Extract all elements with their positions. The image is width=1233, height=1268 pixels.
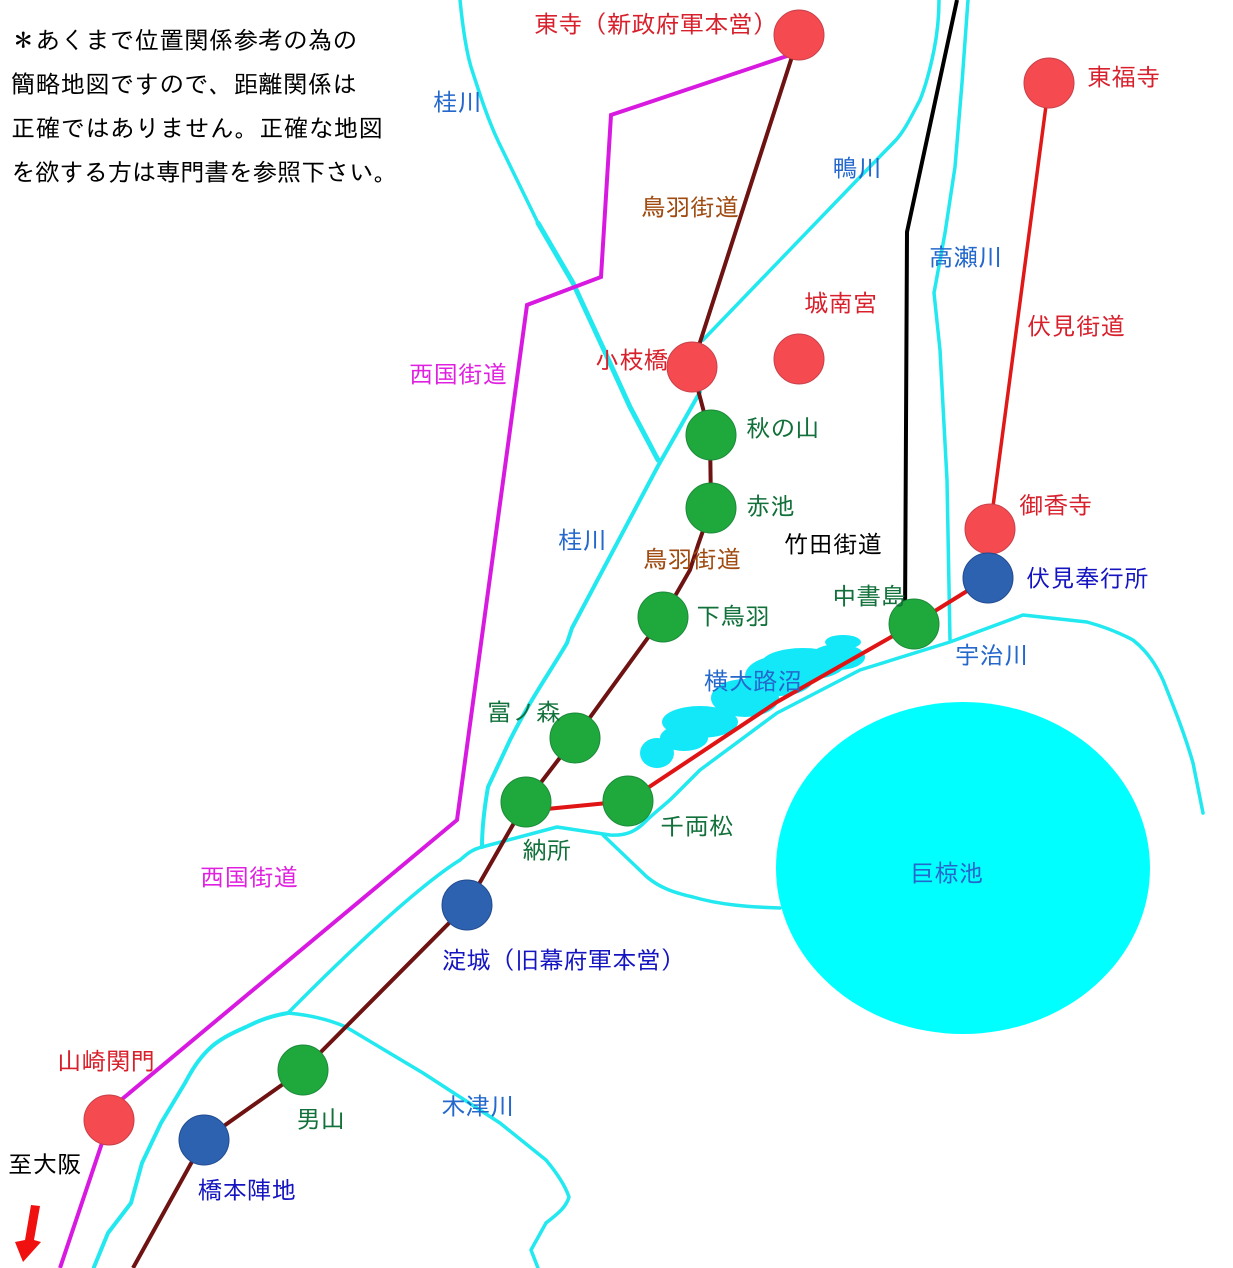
labels: rivers	[433, 90, 1028, 1121]
arrow: to Osaka	[15, 1205, 41, 1262]
labels: rivers: 木津川	[441, 1094, 514, 1121]
labels: Toba Kaido	[641, 195, 741, 574]
river: Katsura upper thick section	[538, 223, 658, 460]
labels: red places: 山崎関門	[57, 1049, 155, 1076]
labels: Toba Kaido: 鳥羽街道	[643, 547, 741, 574]
labels: black: 竹田街道	[784, 532, 882, 559]
road: Saigoku Kaido	[60, 53, 796, 1268]
river: Kizu east	[288, 1013, 569, 1268]
labels: black	[8, 532, 882, 1179]
labels: red places: 城南宮	[804, 291, 878, 318]
red markers	[84, 10, 1074, 1145]
labels: rivers: 宇治川	[955, 643, 1028, 670]
labels: green places: 赤池	[746, 494, 795, 521]
labels: green places: 下鳥羽	[696, 604, 770, 631]
labels: Toba Kaido: 鳥羽街道	[641, 195, 739, 222]
river: Ogura outlet	[603, 835, 780, 908]
road: Fushimi to Yodo	[526, 578, 988, 811]
note text	[11, 28, 398, 187]
labels: black: 至大阪	[8, 1152, 82, 1179]
blue markers	[179, 553, 1013, 1165]
labels: rivers: 桂川	[558, 528, 607, 555]
labels: green places: 千両松	[660, 814, 734, 841]
river: Katsura lower	[482, 392, 700, 847]
road: Toba Kaido	[133, 35, 799, 1268]
green markers	[278, 410, 939, 1095]
note text: ＊あくまで位置関係参考の為の	[11, 28, 357, 55]
labels: green places: 納所	[522, 838, 571, 865]
road: Takeda Kaido	[905, 0, 957, 622]
labels: blue places: 伏見奉行所	[1026, 566, 1148, 593]
labels: rivers: 巨椋池	[910, 861, 984, 888]
labels: red places: 東寺（新政府軍本営）	[534, 12, 777, 39]
river: Kizu west	[94, 1013, 288, 1267]
labels: rivers: 鴨川	[833, 156, 882, 183]
note text: を欲する方は専門書を参照下さい。	[11, 160, 398, 187]
labels: red places: 小枝橋	[595, 348, 668, 375]
river: Kamo	[703, 0, 939, 340]
labels: green places: 男山	[296, 1107, 345, 1134]
river: Takase	[934, 0, 968, 640]
labels: red places: 東福寺	[1087, 65, 1160, 92]
labels: red places: 伏見街道	[1027, 314, 1125, 341]
labels: rivers: 横大路沼	[704, 669, 802, 696]
river: Yodo	[288, 847, 482, 1013]
labels: rivers: 高瀬川	[929, 245, 1002, 272]
marsh: Yokotaiji-numa	[640, 635, 865, 768]
lake: Ogura-ike	[776, 702, 1150, 1034]
labels: blue places: 淀城（旧幕府軍本営）	[442, 948, 685, 975]
labels: green places: 富ノ森	[487, 700, 560, 727]
river: Katsura upper	[460, 0, 538, 223]
labels: red places	[57, 12, 1160, 1076]
labels: rivers: 桂川	[433, 90, 482, 117]
river: Uji	[482, 615, 1203, 847]
labels: Saigoku Kaido: 西国街道	[409, 362, 507, 389]
labels: blue places: 橋本陣地	[198, 1178, 296, 1205]
labels: Saigoku Kaido: 西国街道	[200, 865, 298, 892]
note text: 簡略地図ですので、距離関係は	[11, 72, 357, 99]
labels: Saigoku Kaido	[200, 362, 507, 892]
labels: red places: 御香寺	[1019, 493, 1092, 520]
road: Fushimi Kaido	[990, 83, 1049, 529]
labels: blue places	[198, 566, 1148, 1205]
labels: green places: 秋の山	[746, 416, 820, 443]
labels: green places: 中書島	[832, 584, 906, 611]
note text: 正確ではありません。正確な地図	[11, 116, 383, 143]
labels: green places	[296, 416, 906, 1134]
